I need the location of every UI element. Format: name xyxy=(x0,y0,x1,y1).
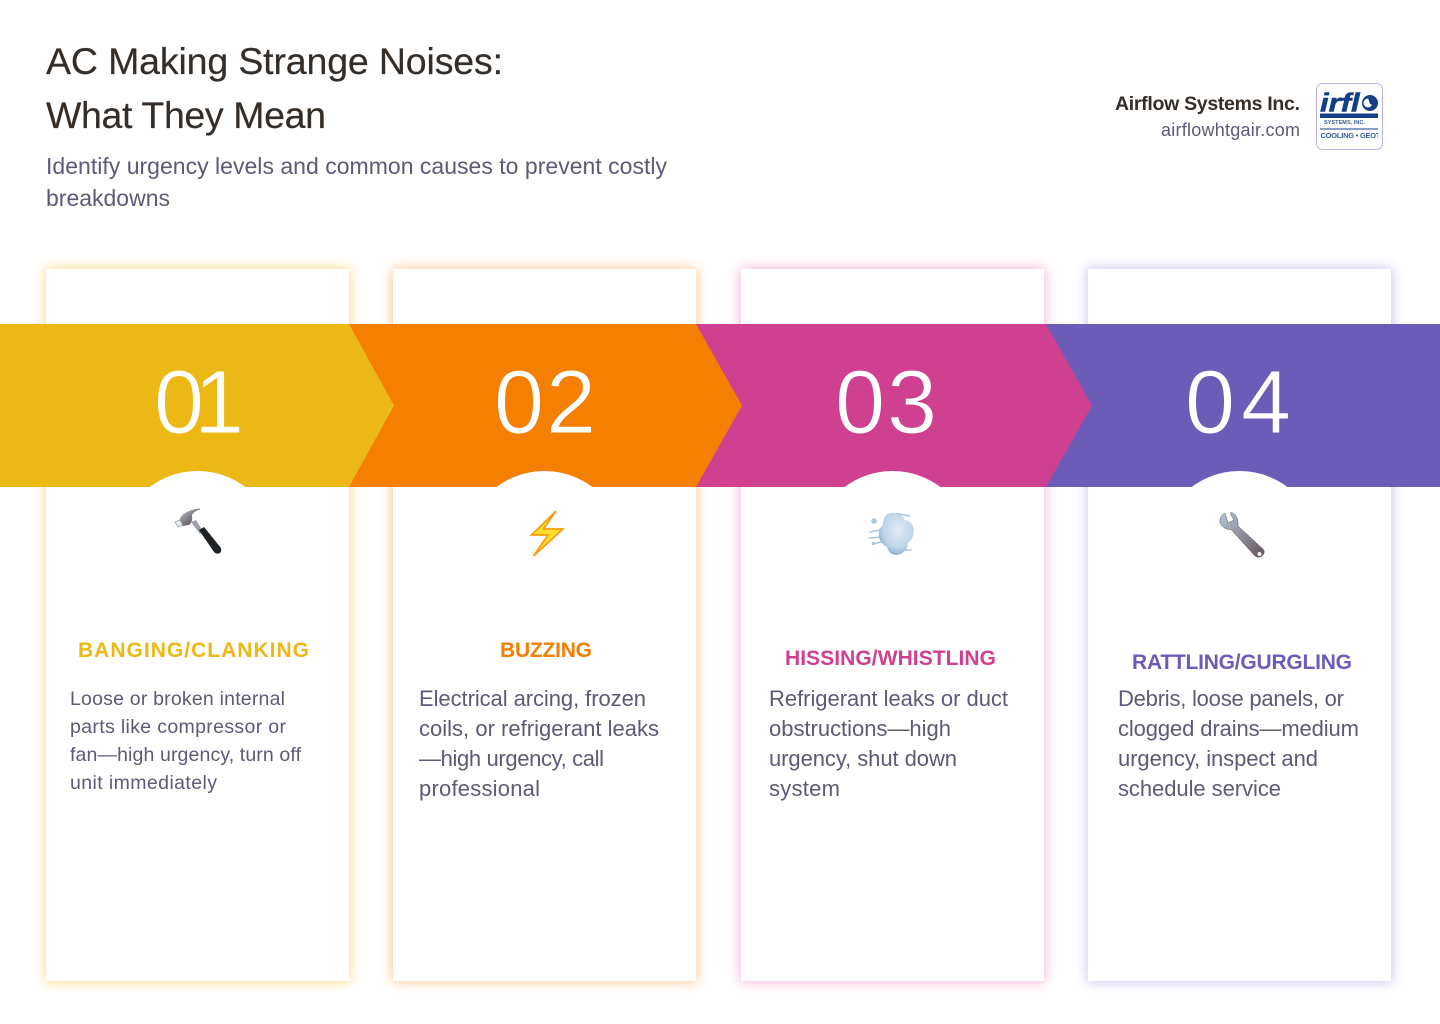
title xyxy=(46,40,503,136)
heading: banging/clanking: BANGING/CLANKING xyxy=(78,639,309,662)
number 04: 04 xyxy=(1185,353,1291,453)
icon circle 1 xyxy=(118,471,278,631)
number 01: 01 xyxy=(154,353,244,453)
arrow band: step 2 xyxy=(340,324,742,487)
text block: card 4 description: Debris, loose panels, or xyxy=(1118,686,1344,711)
text block: card 3 description: system xyxy=(769,776,840,801)
icon: wrench xyxy=(1220,512,1264,557)
text block: card 3 description: obstructions—high xyxy=(769,716,951,741)
icon circle 2 xyxy=(464,471,624,631)
text block: card 2 description xyxy=(419,686,659,801)
icon: hammer xyxy=(175,508,221,554)
text block: card 4 description: clogged drains—medium xyxy=(1118,716,1359,741)
subtitle: Identify urgency levels and common causes to prevent costly xyxy=(46,153,668,179)
company name and website xyxy=(1115,93,1300,140)
text block: card 1 description xyxy=(70,688,302,794)
heading: rattling/gurgling: RATTLING/GURGLING xyxy=(1132,651,1352,674)
text block: card 2 description: professional xyxy=(419,776,540,801)
company name and website: airflowhtgair.com xyxy=(1161,120,1300,140)
text block: card 1 description: parts like compressor or xyxy=(70,716,286,738)
subtitle xyxy=(46,153,668,211)
icon: company logo: COOLING • GEOT xyxy=(1320,131,1381,140)
text block: card 4 description: urgency, inspect and xyxy=(1118,746,1318,771)
text block: card 2 description: —high urgency, call xyxy=(419,746,604,771)
icon: company logo xyxy=(1316,84,1382,150)
text block: card 4 description: schedule service xyxy=(1118,776,1281,801)
text block: card 1 description: fan—high urgency, turn off xyxy=(70,744,302,766)
text block: card 4 description xyxy=(1118,686,1359,801)
subtitle: breakdowns xyxy=(46,185,170,211)
number 03: 03 xyxy=(835,353,937,453)
text block: card 2 description: Electrical arcing, frozen xyxy=(419,686,646,711)
title: What They Mean xyxy=(46,94,326,136)
text block: card 3 description: urgency, shut down xyxy=(769,746,957,771)
icon circle 4 xyxy=(1160,471,1320,631)
arrow band: step 4 xyxy=(1040,324,1440,487)
icon circle 3 xyxy=(812,471,972,631)
icon: company logo: irfl xyxy=(1320,89,1361,118)
panel: card 1 xyxy=(45,268,350,982)
panel: card 3 xyxy=(740,268,1045,982)
icon: dash of air cloud xyxy=(869,513,914,555)
number 02: 02 xyxy=(494,353,596,453)
icon: company logo: SYSTEMS, INC. xyxy=(1324,120,1365,126)
heading: buzzing: BUZZING xyxy=(500,639,592,662)
text block: card 1 description: Loose or broken internal xyxy=(70,688,285,710)
text block: card 2 description: coils, or refrigerant leaks xyxy=(419,716,659,741)
panel: card 2 xyxy=(392,268,697,982)
icon: lightning bolt xyxy=(532,511,563,556)
title: AC Making Strange Noises: xyxy=(46,40,503,82)
arrow band: step 1 xyxy=(0,324,394,487)
text block: card 1 description: unit immediately xyxy=(70,772,217,794)
arrow band: step 3 xyxy=(690,324,1092,487)
panel: card 4 xyxy=(1087,268,1392,982)
company name and website: Airflow Systems Inc. xyxy=(1115,93,1300,115)
text block: card 3 description: Refrigerant leaks or duct xyxy=(769,686,1008,711)
heading: hissing/whistling: HISSING/WHISTLING xyxy=(785,647,996,670)
text block: card 3 description xyxy=(769,686,1008,801)
